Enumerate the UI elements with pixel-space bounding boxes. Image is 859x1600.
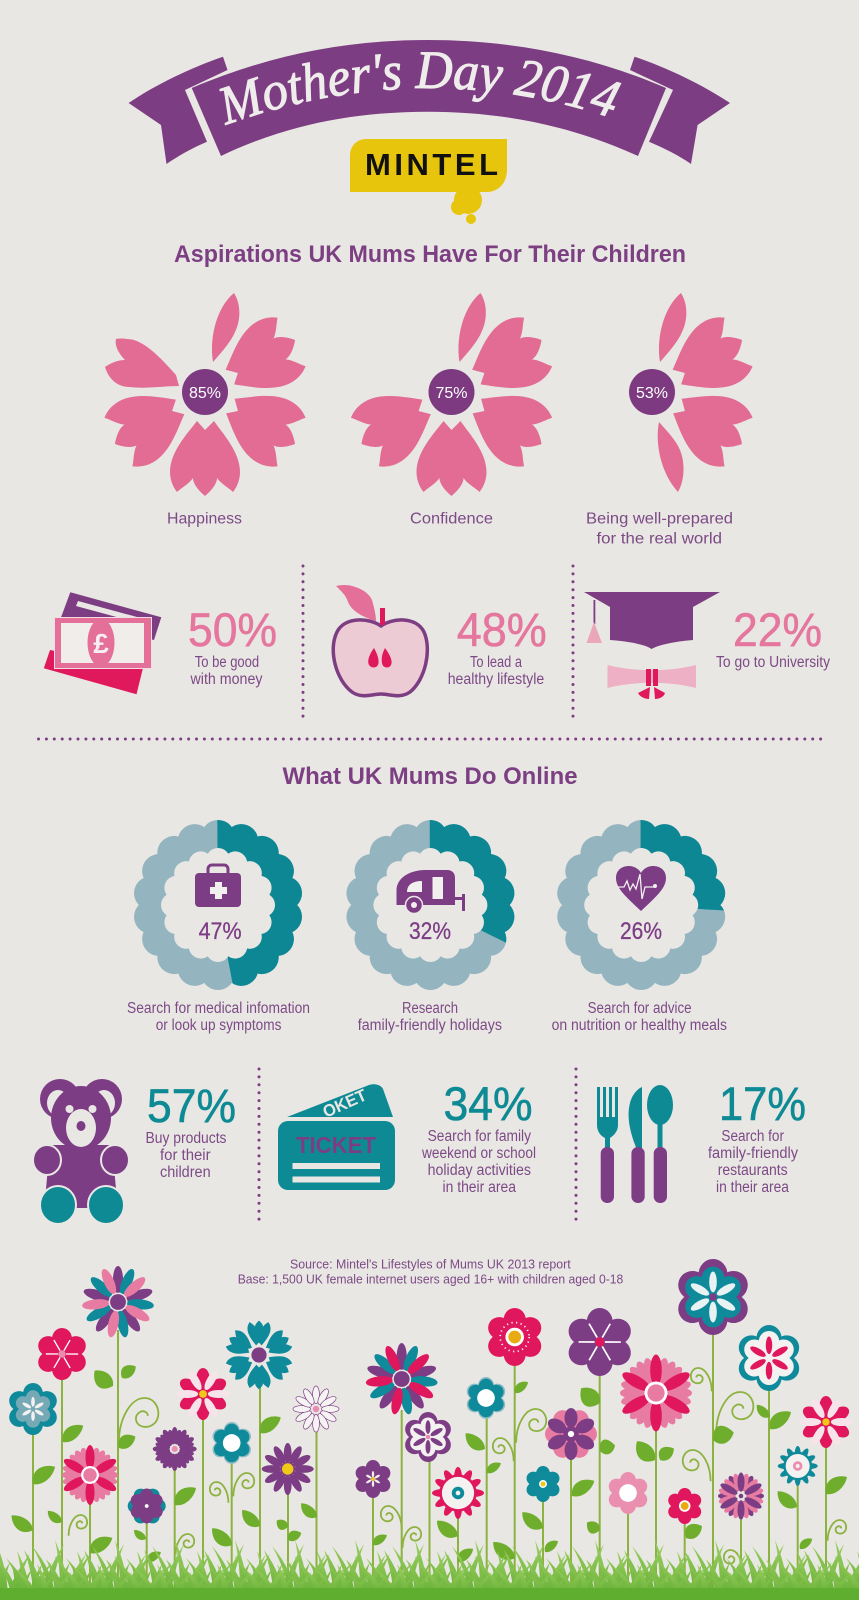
flower: crimson ring bbox=[432, 1467, 484, 1519]
pink flower chart: 53% being well-prepared: for the real world bbox=[596, 530, 722, 548]
flower: pink ring bbox=[606, 1472, 650, 1514]
flower: pink burst bbox=[56, 1441, 124, 1509]
pink flower chart: 53% being well-prepared bbox=[586, 293, 760, 548]
grass bbox=[0, 1540, 859, 1600]
flower: crimson yellow ring bbox=[484, 1308, 545, 1366]
pink flower chart: 75% confidence bbox=[344, 293, 559, 528]
ring chart: 32% holidays: 32% bbox=[409, 918, 451, 945]
stat: 50% good with money: with money bbox=[190, 671, 263, 688]
stat: 17% restaurants: 17% bbox=[719, 1077, 806, 1130]
stat: 48% healthy lifestyle: To lead a bbox=[470, 654, 522, 671]
stat: 57% buy products: children bbox=[160, 1164, 211, 1181]
icon: tickets: OKET bbox=[320, 1085, 370, 1122]
stat: 34% family activities: weekend or school bbox=[421, 1145, 536, 1162]
pink flower chart: 85% happiness bbox=[97, 293, 313, 528]
flower: crimson yellow bbox=[791, 1386, 859, 1458]
flower: small crimson bbox=[666, 1488, 704, 1524]
stat: 22% go to university: 22% bbox=[733, 603, 822, 656]
flower stems bbox=[33, 1330, 826, 1595]
Mintel logo bbox=[350, 139, 507, 224]
flower: crimson white bbox=[168, 1358, 238, 1430]
flower: tri-colour spiky bbox=[70, 1251, 169, 1350]
pink flower chart: 53% being well-prepared: 53% bbox=[636, 385, 668, 402]
flower: purple yellow bbox=[262, 1443, 314, 1495]
ring chart: 26% nutrition bbox=[552, 819, 728, 1034]
dotted dividers, second row bbox=[259, 1069, 576, 1225]
stat: 57% buy products bbox=[33, 1079, 236, 1224]
ring chart: 32% holidays: Research bbox=[402, 1000, 458, 1017]
icon: cutlery bbox=[597, 1085, 673, 1203]
source note: Base: 1,500 UK female internet users aged 16+ with children aged 0-18 bbox=[238, 1272, 623, 1286]
stat: 57% buy products: Buy products bbox=[146, 1130, 227, 1147]
flower: spiky crimson teal bbox=[354, 1328, 452, 1427]
source note bbox=[238, 1258, 623, 1286]
leaves bbox=[7, 1361, 850, 1565]
icon: heart with pulse bbox=[616, 866, 666, 911]
stat: 34% family activities bbox=[278, 1077, 536, 1196]
flower: large purple teal bbox=[673, 1259, 753, 1335]
flower: big teal bbox=[224, 1321, 294, 1389]
stat: 17% restaurants: family-friendly bbox=[708, 1145, 798, 1162]
ring chart: 32% holidays: family-friendly holidays bbox=[358, 1017, 502, 1034]
icon: medical bag bbox=[195, 865, 241, 907]
stat: 57% buy products: 57% bbox=[147, 1079, 236, 1132]
stat: 17% restaurants: restaurants bbox=[718, 1162, 788, 1179]
flower: teal light bbox=[6, 1383, 60, 1435]
flower: small teal bbox=[524, 1466, 562, 1502]
dotted dividers, first row bbox=[38, 566, 827, 739]
banner title: Mother's Day 2014 bbox=[219, 52, 622, 126]
stat: 50% good with money bbox=[44, 592, 277, 694]
stat: 34% family activities: Search for family bbox=[428, 1128, 531, 1145]
stat: 50% good with money: 50% bbox=[188, 603, 277, 656]
flower: small purple teal bbox=[120, 1480, 174, 1532]
flower: purple daisy bbox=[150, 1425, 199, 1473]
flower: large purple bbox=[564, 1308, 636, 1376]
flower: teal white bbox=[734, 1325, 804, 1391]
stat: 17% restaurants: Search for bbox=[721, 1128, 784, 1145]
banner left tail bbox=[129, 57, 228, 164]
source note: Source: Mintel's Lifestyles of Mums UK 2013 report bbox=[290, 1258, 571, 1272]
stat: 50% good with money: To be good bbox=[195, 654, 259, 671]
stat: 48% healthy lifestyle: healthy lifestyle bbox=[448, 671, 544, 688]
icon: caravan bbox=[396, 870, 465, 914]
flower: teal ring bbox=[210, 1422, 254, 1464]
flower: large pink burst bbox=[612, 1349, 700, 1437]
flower: small purple bbox=[353, 1460, 393, 1498]
ring chart: 47% medical: Search for medical infomation bbox=[127, 1000, 310, 1017]
tendril curls bbox=[69, 1368, 846, 1571]
banner right tail bbox=[630, 57, 730, 164]
ring chart: 26% nutrition: 26% bbox=[620, 918, 662, 945]
heading: online: What UK Mums Do Online bbox=[282, 763, 578, 790]
ring chart: 26% nutrition: Search for advice bbox=[588, 1000, 692, 1017]
icon: tickets bbox=[278, 1084, 395, 1190]
flower: white outline bbox=[293, 1386, 339, 1432]
stat: 57% buy products: for their bbox=[160, 1147, 211, 1164]
icon: teddy bear bbox=[33, 1079, 129, 1224]
pink flower chart: 85% happiness: 85% bbox=[189, 385, 221, 402]
flower: teal ring pink centre bbox=[778, 1446, 818, 1486]
flower: crimson stamen bbox=[35, 1328, 89, 1380]
title banner bbox=[128, 40, 730, 164]
icon: graduation cap and diploma bbox=[584, 592, 720, 699]
stat: 17% restaurants bbox=[597, 1077, 806, 1203]
heading: aspirations: Aspirations UK Mums Have For Their Children bbox=[174, 241, 686, 268]
icon: tickets: TICKET bbox=[296, 1132, 376, 1158]
flower: purple pink daisy bbox=[713, 1468, 769, 1524]
stat: 48% healthy lifestyle: 48% bbox=[457, 603, 547, 656]
stat: 22% go to university bbox=[584, 592, 830, 699]
ring chart: 47% medical bbox=[127, 819, 310, 1034]
flower: pink purple bbox=[534, 1398, 608, 1470]
banner main band bbox=[192, 40, 666, 156]
Mintel logo: MINTEL bbox=[365, 147, 498, 182]
stat: 48% healthy lifestyle bbox=[333, 585, 547, 696]
stat: 34% family activities: 34% bbox=[444, 1077, 532, 1130]
ring chart: 32% holidays bbox=[344, 819, 517, 1034]
stat: 34% family activities: holiday activities bbox=[428, 1162, 531, 1179]
pink flower chart: 53% being well-prepared: Being well-prepared bbox=[586, 510, 733, 528]
icon: apple bbox=[333, 585, 427, 696]
stat: 22% go to university: To go to University bbox=[716, 654, 830, 671]
flower garden bbox=[6, 1251, 859, 1595]
icon: banknotes bbox=[44, 592, 161, 694]
flower: purple white bbox=[402, 1412, 454, 1462]
icon: banknotes: £ bbox=[93, 628, 109, 659]
pink flower chart: 85% happiness: Happiness bbox=[167, 510, 242, 528]
ring chart: 47% medical: 47% bbox=[199, 918, 242, 945]
ring chart: 26% nutrition: on nutrition or healthy meals bbox=[552, 1017, 727, 1034]
stat: 34% family activities: in their area bbox=[442, 1179, 516, 1196]
pink flower chart: 75% confidence: 75% bbox=[436, 385, 468, 402]
ring chart: 47% medical: or look up symptoms bbox=[156, 1017, 282, 1034]
pink flower chart: 75% confidence: Confidence bbox=[410, 510, 493, 528]
flower: teal ring 2 bbox=[464, 1377, 508, 1419]
stat: 17% restaurants: in their area bbox=[716, 1179, 789, 1196]
